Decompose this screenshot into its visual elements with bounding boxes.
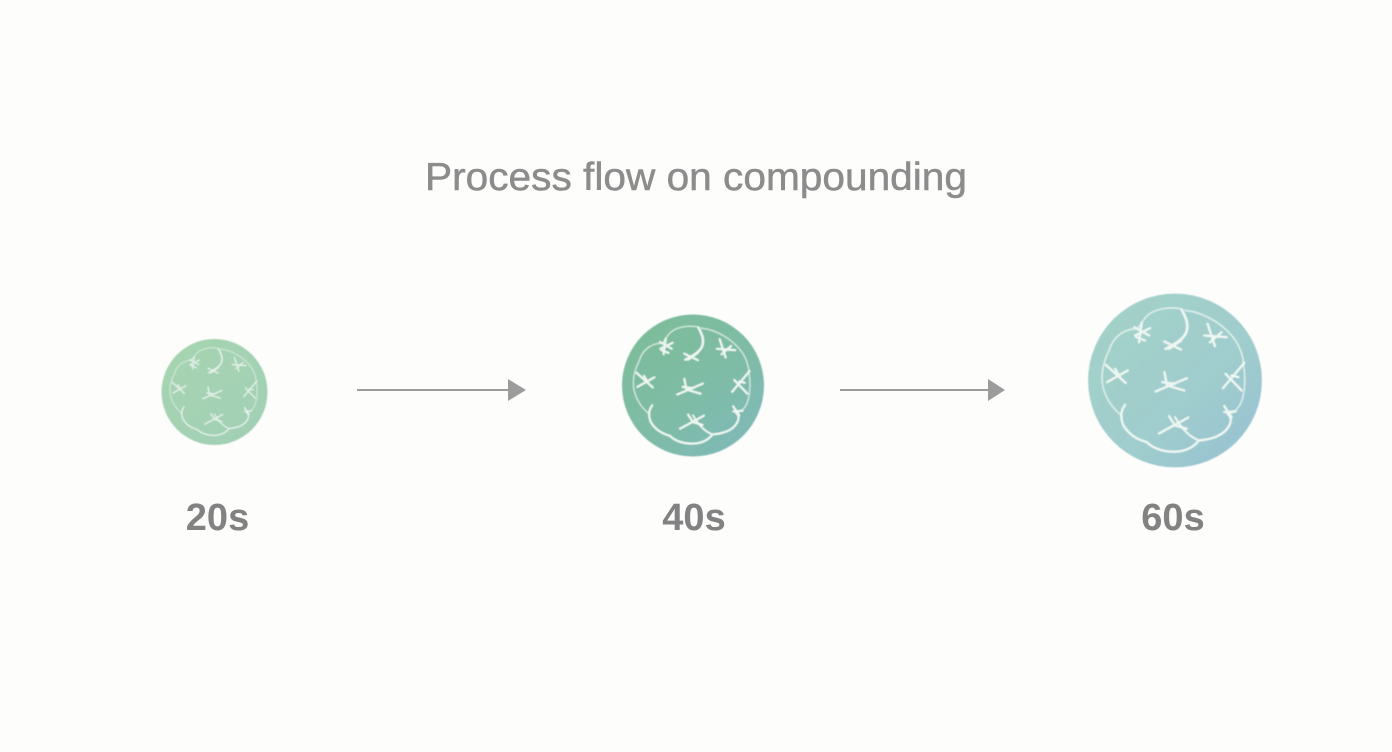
- label: 20s: 20s: [186, 497, 249, 539]
- label: 60s: 60s: [1141, 497, 1205, 539]
- label: 40s: 40s: [662, 497, 726, 539]
- circle: 40s: [622, 315, 764, 456]
- title: Process flow on compounding: [425, 156, 967, 199]
- circle: 60s: [1088, 294, 1262, 467]
- arrow: [357, 379, 526, 401]
- stage: 60s: [1088, 294, 1262, 539]
- stage: 20s: [162, 339, 526, 539]
- circle: 20s: [162, 339, 267, 445]
- stage: 40s: [622, 315, 1005, 539]
- arrow: [840, 379, 1005, 401]
